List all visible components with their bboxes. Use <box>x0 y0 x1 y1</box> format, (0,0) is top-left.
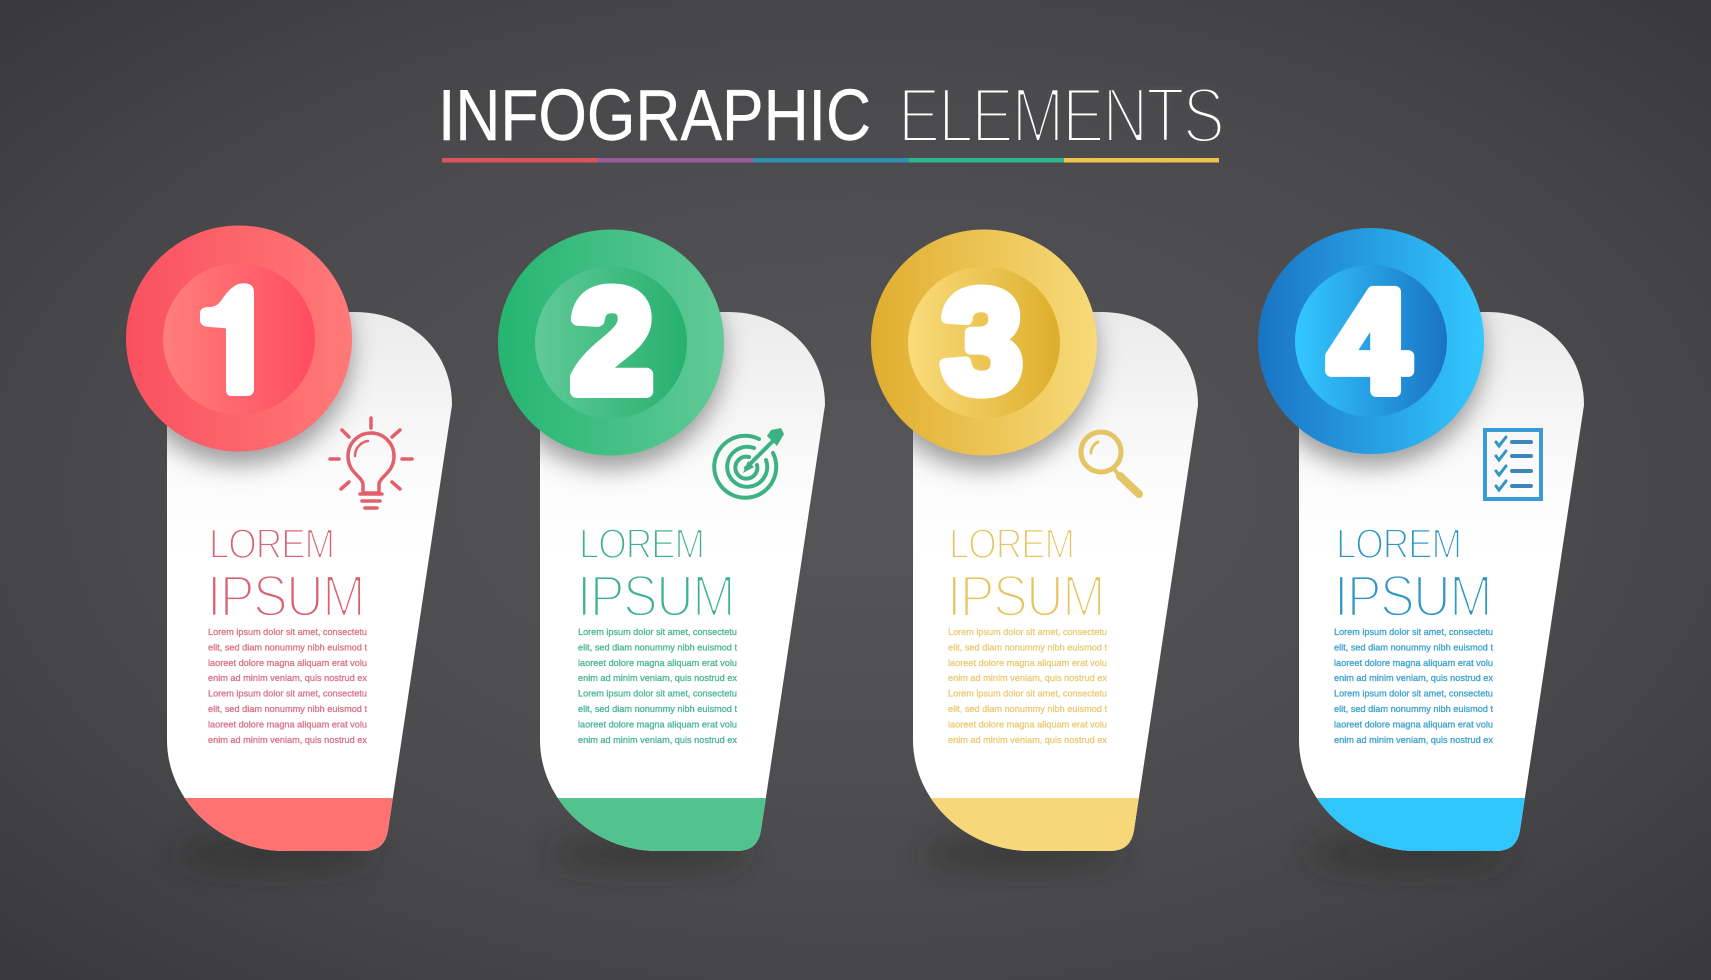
body text <box>948 627 1107 746</box>
panel: step 4 <box>1258 228 1592 867</box>
heading: lorem ipsum <box>577 520 734 629</box>
body text: Lorem ipsum dolor sit amet, consectetu <box>578 689 737 700</box>
icon: checklist <box>1485 430 1541 499</box>
heading: lorem ipsum: LOREM <box>1336 520 1461 567</box>
title: ELEMENTS <box>898 71 1223 159</box>
heading: lorem ipsum <box>1334 520 1491 629</box>
number badge 1 <box>126 226 352 452</box>
body text: enim ad minim veniam, quis nostrud ex <box>208 673 367 684</box>
heading: lorem ipsum: LOREM <box>209 520 334 567</box>
body text: elit, sed diam nonummy nibh euismod t <box>208 704 367 715</box>
title: INFOGRAPHIC <box>438 75 871 156</box>
body text: Lorem ipsum dolor sit amet, consectetu <box>1334 689 1493 700</box>
heading: lorem ipsum <box>947 520 1104 629</box>
body text: Lorem ipsum dolor sit amet, consectetu <box>948 627 1107 638</box>
body text: laoreet dolore magna aliquam erat volu <box>1334 719 1493 730</box>
body text: elit, sed diam nonummy nibh euismod t <box>1334 642 1493 653</box>
icon: target <box>714 428 784 498</box>
body text: elit, sed diam nonummy nibh euismod t <box>948 642 1107 653</box>
title underline <box>442 158 1219 162</box>
body text: elit, sed diam nonummy nibh euismod t <box>208 642 367 653</box>
body text: laoreet dolore magna aliquam erat volu <box>578 658 737 669</box>
heading: lorem ipsum: LOREM <box>949 520 1074 567</box>
heading: lorem ipsum: IPSUM <box>947 564 1104 629</box>
icon: magnifying glass <box>1081 432 1139 494</box>
body text: laoreet dolore magna aliquam erat volu <box>948 719 1107 730</box>
panel: step 2 <box>498 230 833 867</box>
number badge 2: 2 <box>572 261 652 422</box>
number badge 2 <box>498 230 724 456</box>
body text: enim ad minim veniam, quis nostrud ex <box>948 735 1107 746</box>
body text: enim ad minim veniam, quis nostrud ex <box>1334 673 1493 684</box>
title <box>438 71 1223 159</box>
body text: enim ad minim veniam, quis nostrud ex <box>578 673 737 684</box>
body text <box>208 627 367 746</box>
number badge 4: 4 <box>1329 261 1409 422</box>
body text: Lorem ipsum dolor sit amet, consectetu <box>1334 627 1493 638</box>
heading: lorem ipsum: IPSUM <box>577 564 734 629</box>
heading: lorem ipsum: IPSUM <box>1334 564 1491 629</box>
body text <box>578 627 737 746</box>
body text <box>1334 627 1493 746</box>
body text: Lorem ipsum dolor sit amet, consectetu <box>208 627 367 638</box>
body text: laoreet dolore magna aliquam erat volu <box>948 658 1107 669</box>
icon: light bulb <box>330 418 412 508</box>
panel: step 3 <box>871 230 1206 867</box>
body text: enim ad minim veniam, quis nostrud ex <box>208 735 367 746</box>
body text: enim ad minim veniam, quis nostrud ex <box>1334 735 1493 746</box>
number badge 3 <box>871 230 1097 456</box>
body text: laoreet dolore magna aliquam erat volu <box>1334 658 1493 669</box>
heading: lorem ipsum: IPSUM <box>207 564 364 629</box>
number badge 1: 1 <box>189 258 271 423</box>
number badge 4 <box>1258 228 1484 454</box>
body text: Lorem ipsum dolor sit amet, consectetu <box>208 689 367 700</box>
number badge 3: 3 <box>942 261 1022 422</box>
body text: Lorem ipsum dolor sit amet, consectetu <box>578 627 737 638</box>
heading: lorem ipsum: LOREM <box>579 520 704 567</box>
body text: elit, sed diam nonummy nibh euismod t <box>1334 704 1493 715</box>
body text: elit, sed diam nonummy nibh euismod t <box>578 704 737 715</box>
panel: step 1 <box>126 226 460 867</box>
body text: enim ad minim veniam, quis nostrud ex <box>578 735 737 746</box>
heading: lorem ipsum <box>207 520 364 629</box>
body text: elit, sed diam nonummy nibh euismod t <box>578 642 737 653</box>
body text: elit, sed diam nonummy nibh euismod t <box>948 704 1107 715</box>
body text: laoreet dolore magna aliquam erat volu <box>578 719 737 730</box>
body text: enim ad minim veniam, quis nostrud ex <box>948 673 1107 684</box>
body text: laoreet dolore magna aliquam erat volu <box>208 719 367 730</box>
body text: Lorem ipsum dolor sit amet, consectetu <box>948 689 1107 700</box>
body text: laoreet dolore magna aliquam erat volu <box>208 658 367 669</box>
